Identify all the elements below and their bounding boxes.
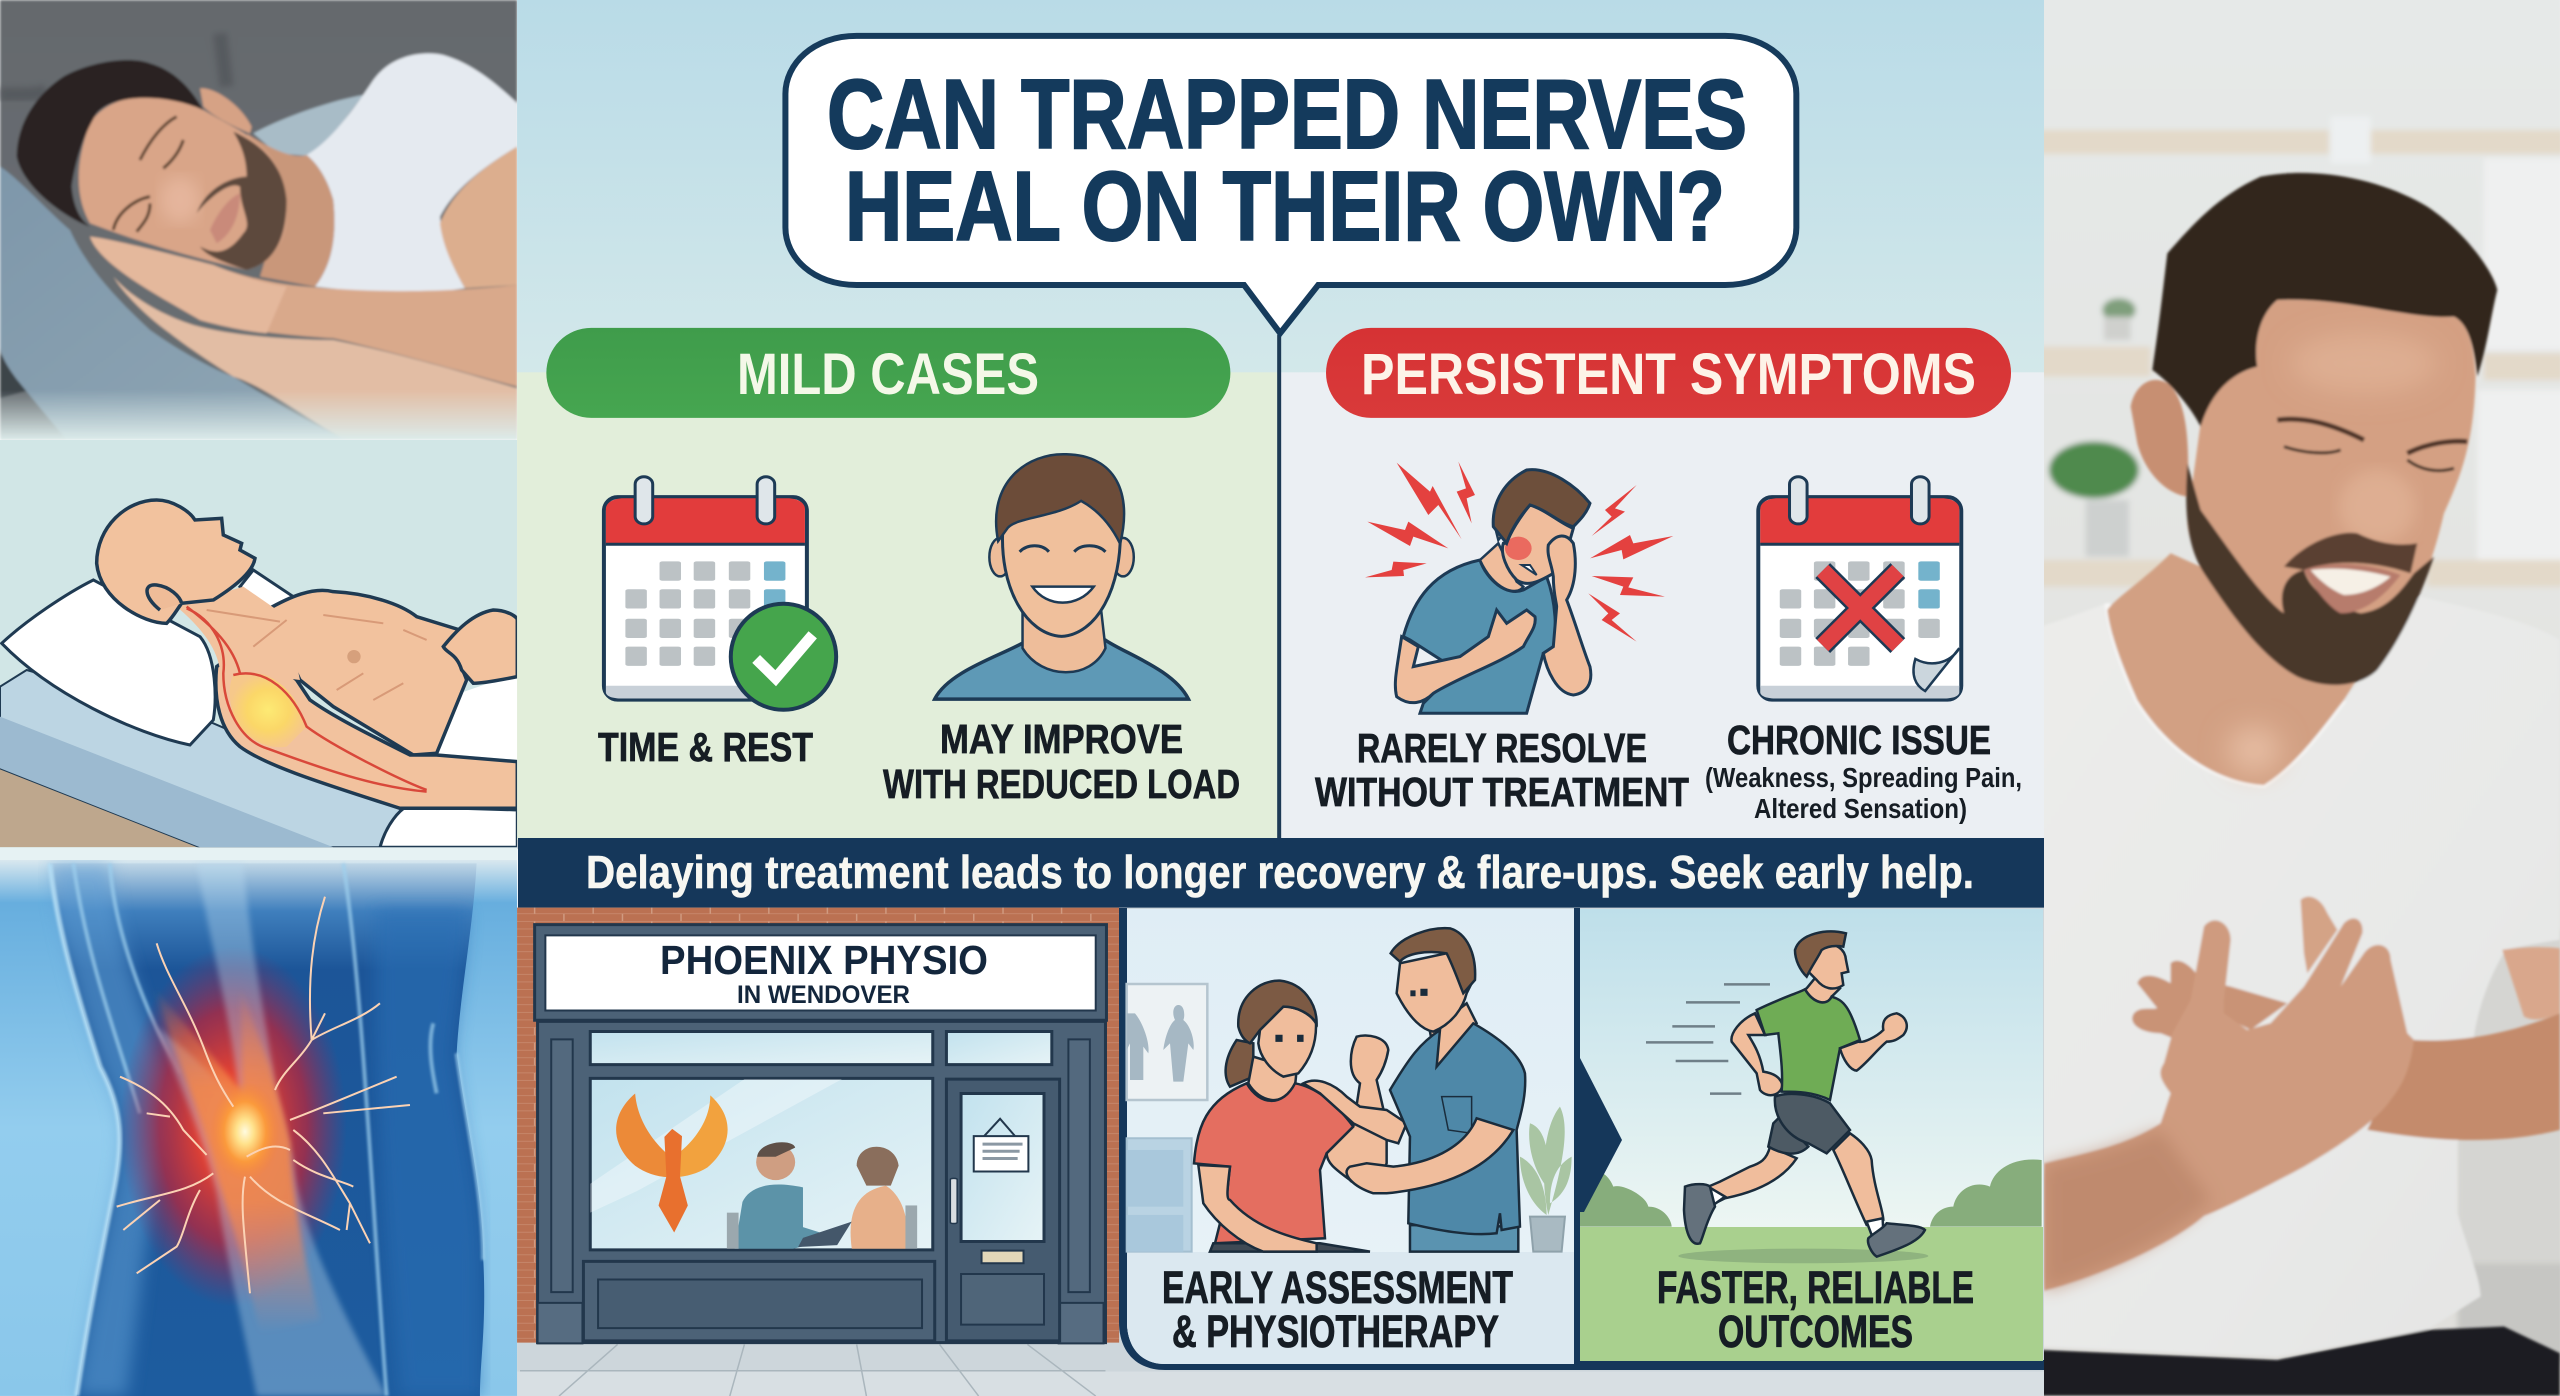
beard: [2186, 463, 2434, 685]
photo: man clutching chest in pain: [2024, 0, 2560, 1396]
icon: calendar with red cross: [1758, 477, 1961, 700]
potted plant: [1520, 1107, 1572, 1252]
heading: can trapped nerves heal on their own: [827, 59, 1747, 261]
hands and forearms: [2044, 897, 2560, 1291]
illustration: person lying with shoulder nerve: [0, 440, 517, 860]
motion lines: [1646, 984, 1770, 1094]
icon: calendar with check: [604, 477, 836, 710]
body with highlighted nerve: [97, 500, 517, 808]
logo: phoenix: [616, 1094, 728, 1233]
figure: runner: [1684, 931, 1925, 1257]
caption: early assessment and physiotherapy: [1162, 1262, 1513, 1357]
black trousers: [2040, 1327, 2560, 1396]
caption: rarely resolve without treatment: WITHOUT TREATMENT: [1315, 769, 1689, 815]
shop sign text: IN WENDOVER: [737, 981, 910, 1009]
photo: man sleeping on his side: [0, 0, 517, 440]
caption: early assessment and physiotherapy: & PHYSIOTHERAPY: [1172, 1306, 1499, 1357]
icon: smiling man: [935, 454, 1188, 699]
icon: man in pain with lightning bolts: [1365, 462, 1673, 713]
caption: faster reliable outcomes: FASTER, RELIABLE: [1657, 1262, 1974, 1313]
caption: may improve with reduced load: [883, 716, 1240, 807]
caption: chronic issue details: [1705, 717, 2022, 824]
white t-shirt: [2040, 597, 2560, 1357]
caption: faster reliable outcomes: OUTCOMES: [1718, 1306, 1913, 1357]
banner: delaying treatment warning: Delaying treatment leads to longer recovery & flare-ups. Seek early help.: [586, 846, 1974, 898]
figure: patient: [1194, 981, 1388, 1252]
neck: [2107, 553, 2377, 785]
wall chart and cabinet: [1127, 984, 1207, 1252]
caption: time and rest: TIME & REST: [598, 724, 813, 770]
arrow between panels: [1580, 1058, 1622, 1212]
face: [2187, 300, 2476, 682]
panel: early assessment and physiotherapy: [1119, 908, 2044, 1370]
illustration: phoenix physio shopfront: [517, 908, 2046, 1396]
label: persistent symptoms: PERSISTENT SYMPTOMS: [1361, 342, 1976, 407]
pill: mild cases: [546, 328, 1230, 418]
pill: persistent symptoms: [1326, 328, 2011, 418]
caption: rarely resolve without treatment: [1315, 725, 1689, 815]
caption: chronic issue details: CHRONIC ISSUE: [1727, 717, 1991, 763]
caption: chronic issue details: (Weakness, Spreading Pain,: [1705, 762, 2022, 793]
background: sky and two-tone split: [517, 0, 2046, 840]
caption: chronic issue details: Altered Sensation): [1754, 793, 1967, 824]
label: mild cases: MILD CASES: [737, 342, 1039, 407]
trees and ground shadow: [1580, 1159, 2042, 1263]
caption: rarely resolve without treatment: RARELY RESOLVE: [1357, 725, 1647, 771]
caption: may improve with reduced load: WITH REDUCED LOAD: [883, 761, 1240, 807]
shop sign text: [660, 937, 988, 1009]
central infographic panel: [517, 0, 2046, 840]
hair: [2152, 173, 2497, 427]
caption: early assessment and physiotherapy: EARLY ASSESSMENT: [1162, 1262, 1513, 1313]
caption: faster reliable outcomes: [1657, 1262, 1974, 1357]
blurred shelves background: [2024, 0, 2560, 1396]
bed and floor: [0, 570, 517, 847]
ear: [2131, 380, 2188, 497]
panel: faster reliable outcomes: [1580, 909, 2043, 1361]
heading: can trapped nerves heal on their own: HEAL ON THEIR OWN?: [845, 151, 1725, 261]
caption: may improve with reduced load: MAY IMPROVE: [940, 716, 1183, 762]
illustration: glowing nerve pain in knee: [0, 860, 517, 1396]
figure: clinician and patient inside window: [727, 1142, 917, 1249]
shop sign text: PHOENIX PHYSIO: [660, 937, 988, 983]
banner: delaying treatment warning: [518, 838, 2044, 908]
heading: can trapped nerves heal on their own: CAN TRAPPED NERVES: [827, 59, 1747, 169]
brows eyes mustache mouth: [2284, 533, 2417, 573]
figure: physiotherapist: [1303, 928, 1525, 1252]
speech bubble heading container: [785, 36, 1796, 333]
